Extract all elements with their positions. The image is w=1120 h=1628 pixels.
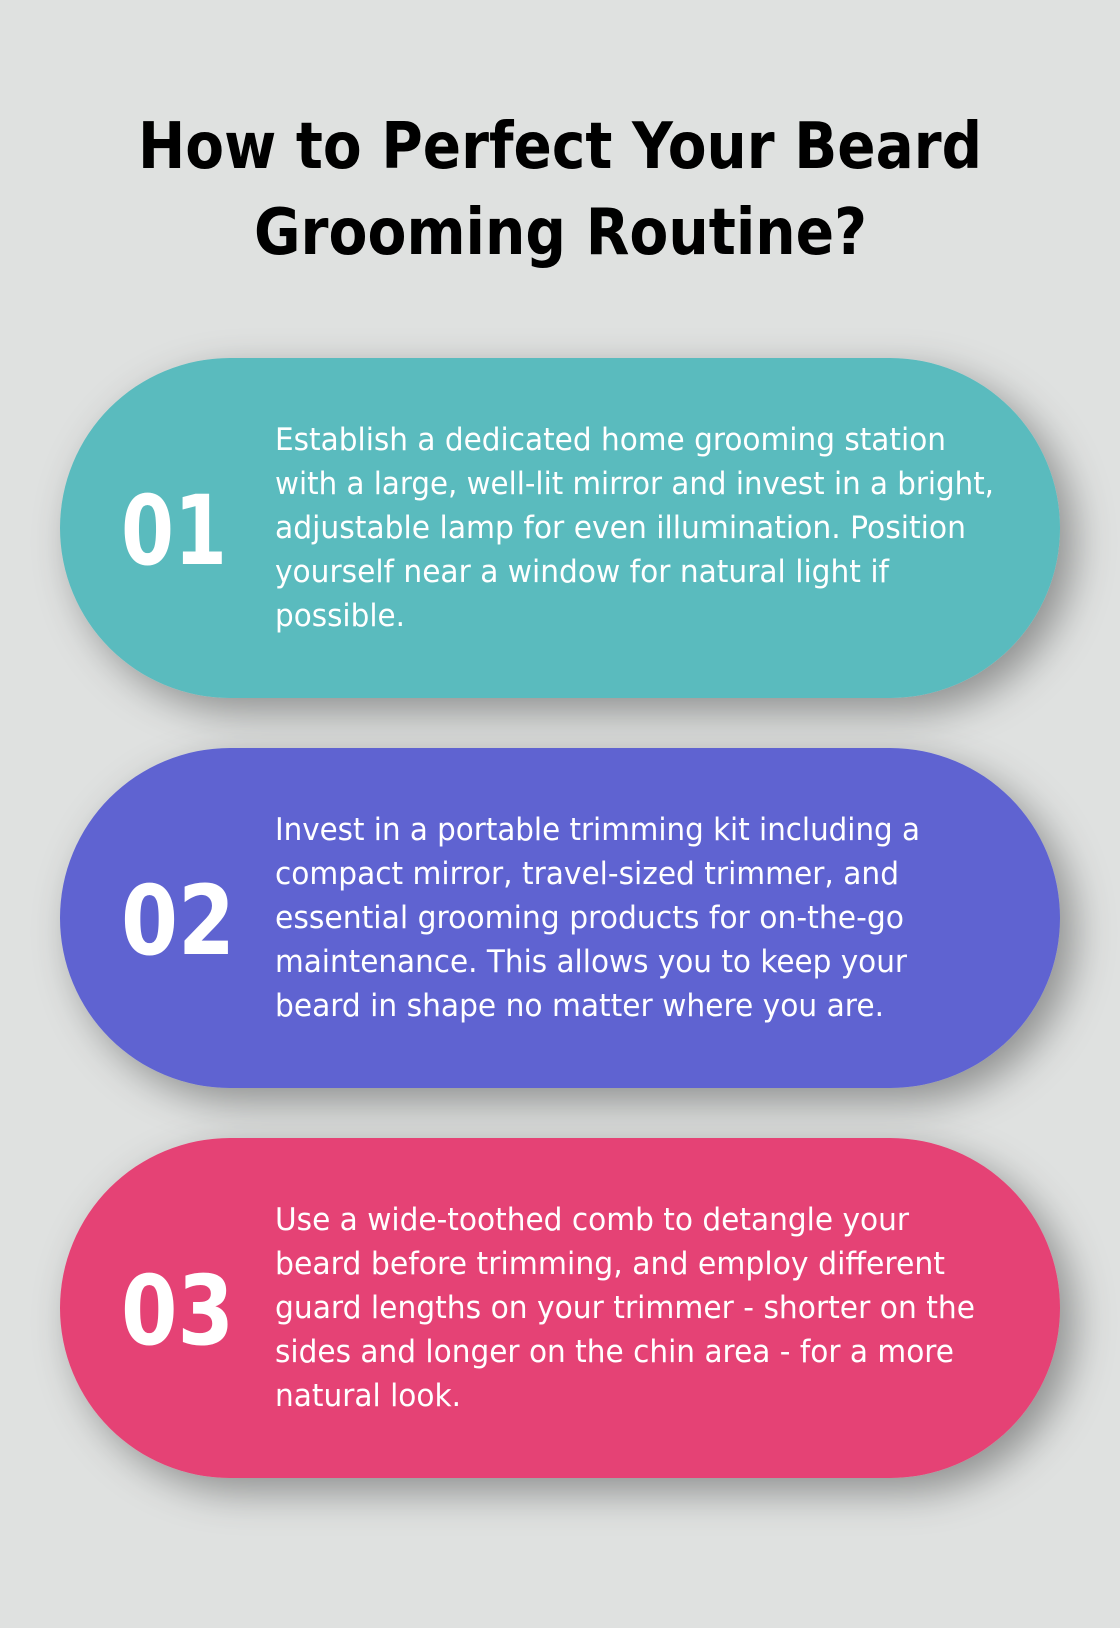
text block: step 03: natural look. (275, 1378, 461, 1414)
text block: step 03: Use a wide-toothed comb to detangle your (275, 1202, 909, 1238)
text block: step 01: yourself near a window for natural light if (275, 554, 890, 590)
text block: step 01: with a large, well-lit mirror and invest in a bright, (275, 466, 994, 502)
text block: step 01: possible. (275, 598, 405, 634)
text block: step 03: beard before trimming, and employ different (275, 1246, 945, 1282)
title: How to Perfect Your Beard (138, 110, 982, 184)
pill: blue (60, 748, 1060, 1088)
text block: step 03: sides and longer on the chin area - for a more (275, 1334, 954, 1370)
panel: step 02 (60, 748, 1060, 1088)
number 01: 01 (121, 475, 227, 587)
pill: teal (60, 358, 1060, 698)
text block: step 02: Invest in a portable trimming kit including a (275, 812, 920, 848)
text block: step 01 (275, 422, 994, 634)
text block: step 02: essential grooming products for on-the-go (275, 900, 904, 936)
text block: step 03: guard lengths on your trimmer - shorter on the (275, 1290, 975, 1326)
text block: step 02: maintenance. This allows you to keep your (275, 944, 907, 980)
number 02: 02 (121, 865, 235, 977)
text block: step 01: adjustable lamp for even illumination. Position (275, 510, 966, 546)
title (138, 110, 982, 270)
pill: pink (60, 1138, 1060, 1478)
panel: step 03 (60, 1138, 1060, 1478)
title: Grooming Routine? (254, 196, 867, 270)
text block: step 02: beard in shape no matter where you are. (275, 988, 884, 1024)
text block: step 01: Establish a dedicated home grooming station (275, 422, 946, 458)
panel: step 01 (60, 358, 1060, 698)
text block: step 03 (275, 1202, 975, 1414)
number 03: 03 (121, 1255, 234, 1367)
text block: step 02: compact mirror, travel-sized trimmer, and (275, 856, 899, 892)
text block: step 02 (275, 812, 920, 1024)
